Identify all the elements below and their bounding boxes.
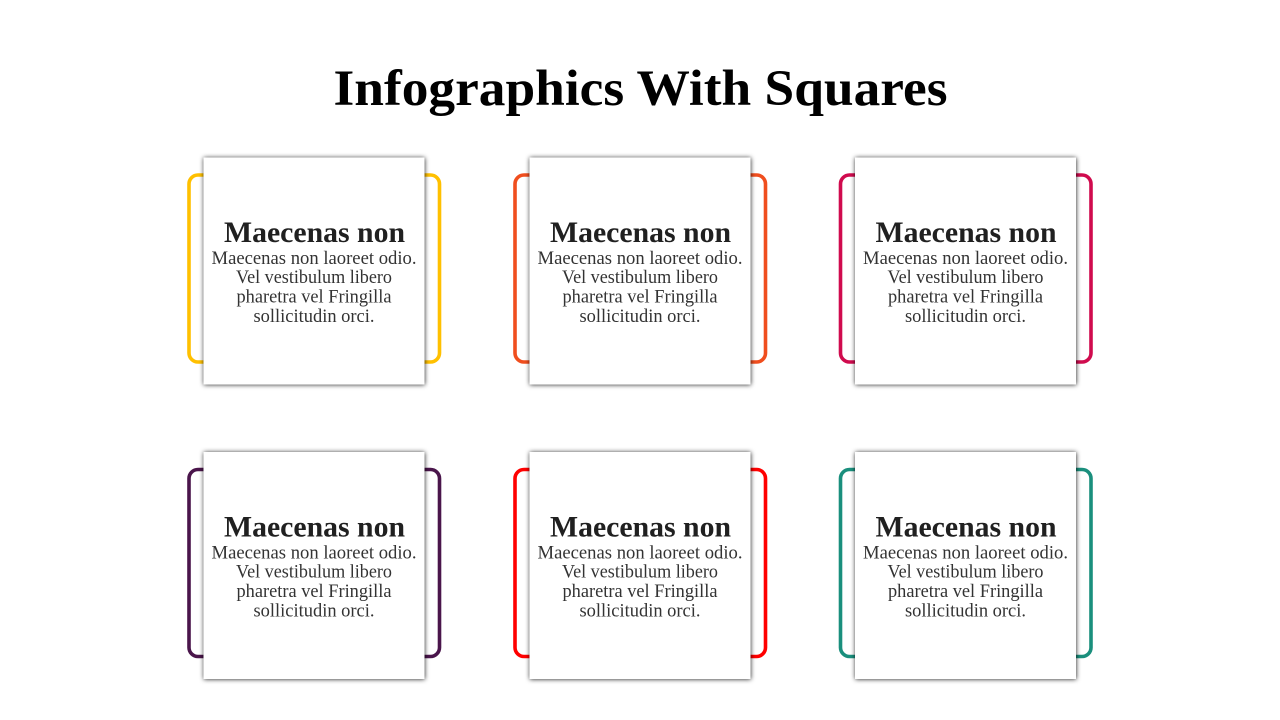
teal frame (840, 470, 1091, 656)
card heading: Maecenas non (550, 217, 731, 249)
card body text: Maecenas non laoreet odio. (212, 249, 416, 269)
card body text: sollicitudin orci. (254, 307, 374, 327)
card body text (212, 249, 416, 327)
card body text: sollicitudin orci. (254, 602, 374, 622)
panel: orange card (515, 158, 766, 384)
panel: teal card (840, 452, 1091, 679)
card heading: Maecenas non (224, 512, 405, 544)
card body text (538, 544, 742, 622)
white square (530, 158, 750, 384)
card heading: Maecenas non (224, 217, 405, 249)
card body text: Maecenas non laoreet odio. (538, 544, 742, 564)
card body text: pharetra vel Fringilla (236, 582, 392, 602)
card body text: Vel vestibulum libero (888, 268, 1044, 288)
card body text: sollicitudin orci. (905, 307, 1026, 327)
card body text: sollicitudin orci. (580, 307, 700, 327)
card heading: Maecenas non (876, 217, 1056, 249)
white square (204, 452, 424, 679)
card body text: pharetra vel Fringilla (236, 288, 392, 308)
panel: crimson card (840, 158, 1091, 384)
card body text: pharetra vel Fringilla (888, 288, 1043, 308)
card body text: Maecenas non laoreet odio. (863, 249, 1068, 269)
card heading: Maecenas non (550, 512, 731, 544)
panel: purple card (189, 452, 440, 679)
panel: red card (515, 452, 766, 679)
card body text (538, 249, 742, 327)
card body text (863, 544, 1068, 622)
panel: yellow card (189, 158, 440, 384)
orange frame (515, 175, 766, 362)
title: Infographics With Squares (334, 61, 948, 117)
card body text: Vel vestibulum libero (888, 562, 1044, 582)
card body text: sollicitudin orci. (580, 602, 700, 622)
card body text (863, 249, 1068, 327)
white square (855, 452, 1076, 679)
card body text: Maecenas non laoreet odio. (212, 544, 416, 564)
card body text: sollicitudin orci. (905, 602, 1026, 622)
white square (530, 452, 750, 679)
crimson frame (840, 175, 1091, 362)
card body text: Vel vestibulum libero (236, 562, 392, 582)
card body text: pharetra vel Fringilla (562, 582, 718, 602)
card body text: Vel vestibulum libero (562, 562, 718, 582)
card body text: pharetra vel Fringilla (562, 288, 718, 308)
card body text: Maecenas non laoreet odio. (863, 544, 1068, 564)
card body text: pharetra vel Fringilla (888, 582, 1043, 602)
card body text: Maecenas non laoreet odio. (538, 249, 742, 269)
yellow frame (189, 175, 440, 362)
red frame (515, 470, 766, 656)
card body text (212, 544, 416, 622)
purple frame (189, 470, 440, 656)
card body text: Vel vestibulum libero (236, 268, 392, 288)
white square (204, 158, 424, 384)
card heading: Maecenas non (876, 512, 1056, 544)
card body text: Vel vestibulum libero (562, 268, 718, 288)
white square (855, 158, 1076, 384)
